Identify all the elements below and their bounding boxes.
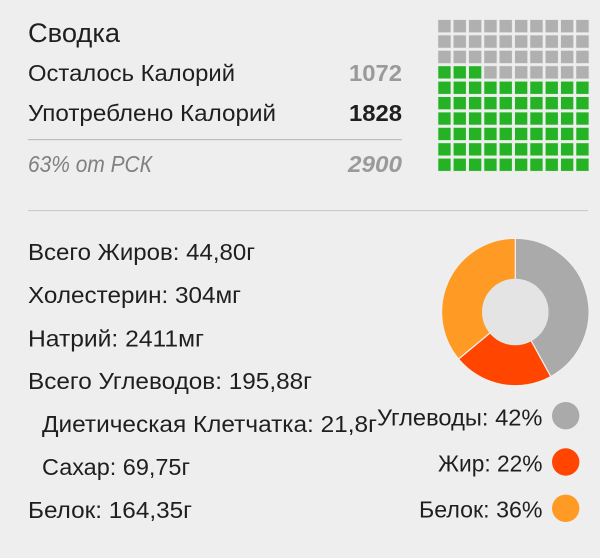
panel: nutrient list [28,239,377,523]
legend: macronutrients [377,402,579,522]
row: calories remaining: 1072 [349,60,402,86]
nutrient: sodium: Натрий: 2411мг [28,326,204,352]
heading: summary: Сводка [28,18,120,48]
segment: carbohydrates 42% [515,238,589,377]
segment: protein 36% [442,238,515,359]
row: calories consumed [28,100,402,126]
legend item: fat: Жир: 22% [438,450,543,476]
row: percent of daily goal: 63% от РСК [28,151,153,177]
nutrient: dietary fiber: Диетическая Клетчатка: 21,8г [42,411,377,437]
chart: macronutrient donut [442,238,589,386]
legend item: carbohydrates: Углеводы: 42% [377,404,543,430]
panel: calorie summary [28,18,402,177]
row: percent of daily goal [28,151,402,177]
row: calories consumed: 1828 [349,100,402,126]
nutrient: total carbohydrates: Всего Углеводов: 195,88г [28,368,312,394]
nutrient: sugar: Сахар: 69,75г [42,454,190,480]
nutrient: total fat: Всего Жиров: 44,80г [28,239,255,265]
nutrient: cholesterol: Холестерин: 304мг [28,282,241,308]
row: calories remaining [28,60,402,86]
chart: waffle of 100 squares, 63 green [438,20,589,171]
row: calories consumed: Употреблено Калорий [28,100,276,126]
segment: fat 22% [458,312,551,386]
nutrient: protein: Белок: 164,35г [28,497,192,523]
legend item: protein: Белок: 36% [419,496,543,522]
row: calories remaining: Осталось Калорий [28,60,235,86]
row: percent of daily goal: 2900 [347,151,402,177]
